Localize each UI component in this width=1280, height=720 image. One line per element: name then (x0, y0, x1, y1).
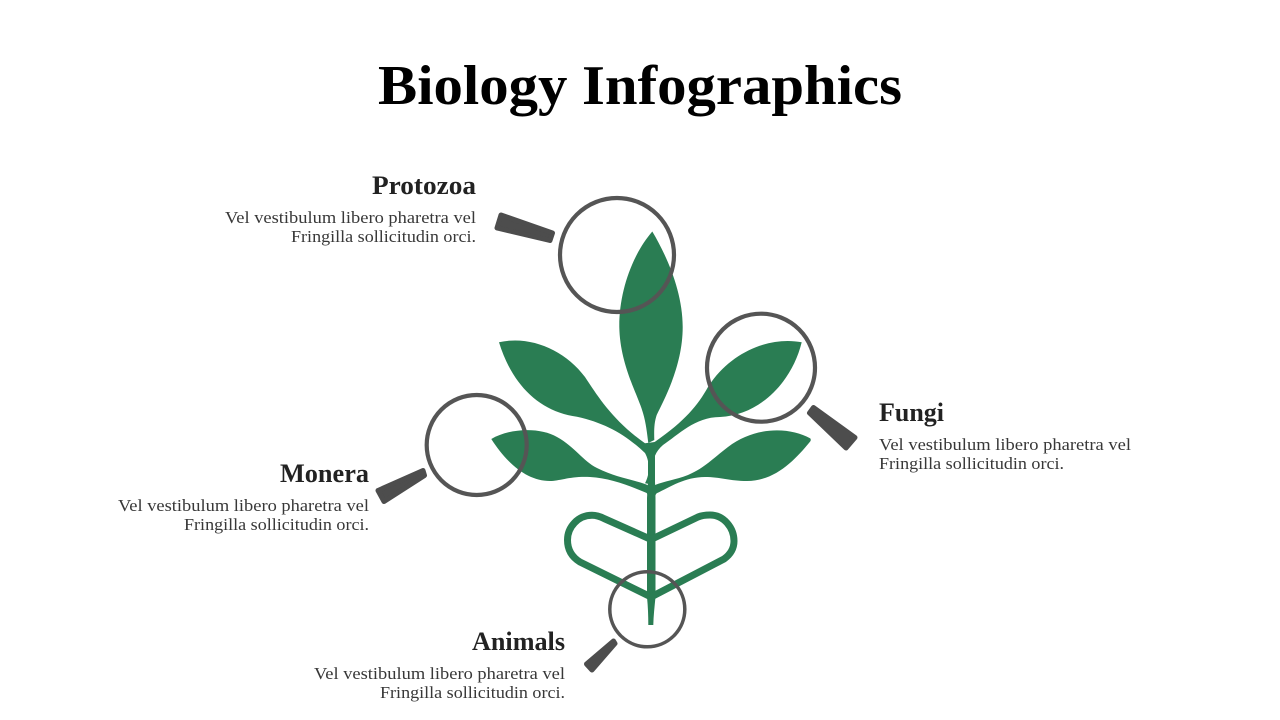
label: monera (118, 459, 369, 534)
label: animals (314, 627, 565, 702)
upper left leaf (499, 340, 655, 485)
label: fungi: Fungi (879, 398, 944, 427)
magnifier: protozoa (497, 198, 674, 312)
plant illustration (491, 232, 811, 625)
label: animals: Vel vestibulum libero pharetra vel (314, 664, 565, 683)
stem (647, 445, 656, 625)
label: fungi: Vel vestibulum libero pharetra vel (879, 435, 1131, 454)
label: monera: Vel vestibulum libero pharetra vel (118, 496, 369, 515)
title: Biology Infographics (378, 55, 902, 117)
upper right leaf (648, 341, 802, 486)
centre leaf (619, 232, 683, 443)
right lobe outline (652, 515, 734, 596)
label: fungi: Fringilla sollicitudin orci. (879, 454, 1064, 473)
magnifier: fungi (707, 314, 855, 448)
label: protozoa: Fringilla sollicitudin orci. (291, 227, 476, 246)
label: animals: Animals (472, 627, 565, 656)
magnifier: monera (378, 395, 527, 502)
label: protozoa (225, 171, 476, 246)
lower left leaf (491, 430, 652, 505)
magnifier: animals (586, 572, 685, 670)
left lobe outline (568, 515, 650, 596)
label: protozoa: Vel vestibulum libero pharetra vel (225, 208, 476, 227)
lower right leaf (650, 430, 811, 505)
label: monera: Monera (280, 459, 369, 488)
label: animals: Fringilla sollicitudin orci. (380, 683, 565, 702)
label: monera: Fringilla sollicitudin orci. (184, 515, 369, 534)
label: protozoa: Protozoa (372, 171, 476, 200)
label: fungi (879, 398, 1131, 473)
